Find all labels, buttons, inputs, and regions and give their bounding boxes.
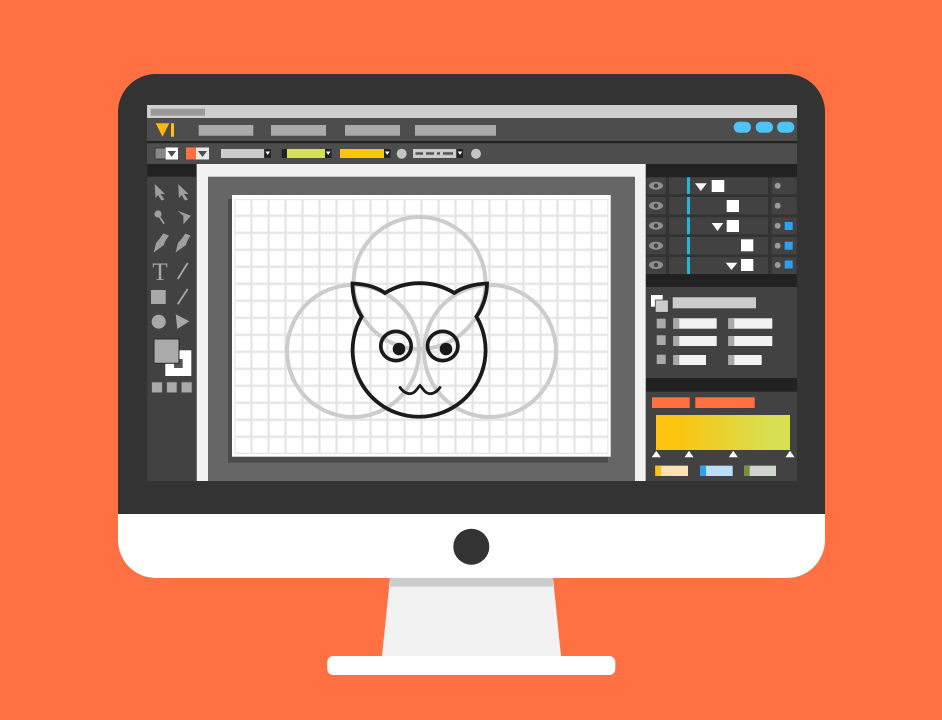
stand base — [327, 656, 615, 675]
tool icons — [151, 184, 191, 329]
power button — [453, 529, 489, 565]
property value fields — [673, 318, 772, 365]
monitor body — [118, 74, 825, 578]
construction circles — [287, 217, 556, 417]
window buttons — [734, 122, 794, 133]
gradient stops — [652, 451, 794, 457]
pupils — [393, 343, 452, 355]
canvas area — [197, 164, 646, 481]
layer row 3 — [647, 217, 797, 234]
gradient tabs — [652, 397, 755, 408]
stroke swatch — [186, 148, 209, 160]
layer row 2 — [647, 197, 797, 214]
head outline with ears — [352, 283, 487, 417]
menu items — [199, 125, 496, 136]
gradient bar — [656, 415, 790, 450]
layers panel — [646, 164, 797, 481]
property checkboxes — [657, 319, 666, 364]
app logo — [156, 123, 174, 137]
layer row 4 — [647, 237, 797, 254]
option dot — [397, 149, 407, 159]
overlapping squares icon — [651, 295, 668, 312]
artboard grid — [232, 195, 611, 457]
application title bar — [147, 105, 797, 118]
properties panel — [646, 287, 797, 378]
monitor stand — [382, 578, 561, 656]
mode buttons — [152, 382, 192, 393]
tool icons: T — [152, 259, 168, 286]
option dot — [471, 149, 481, 159]
eyes — [381, 331, 458, 361]
layer row 1 — [647, 177, 797, 194]
layer row 5 — [647, 257, 797, 274]
options bar — [147, 143, 797, 164]
gradient panel — [646, 378, 797, 481]
property name field — [673, 297, 756, 308]
tool panel — [147, 164, 196, 481]
dropdown fields — [221, 149, 390, 158]
mouth — [400, 386, 440, 394]
colour swatches — [655, 466, 776, 476]
dash style field — [413, 149, 463, 158]
fill and stroke selector — [154, 339, 191, 376]
fill swatch — [155, 148, 178, 160]
menu bar — [147, 118, 797, 143]
layer rows — [647, 177, 797, 274]
cat face drawing — [352, 283, 487, 417]
